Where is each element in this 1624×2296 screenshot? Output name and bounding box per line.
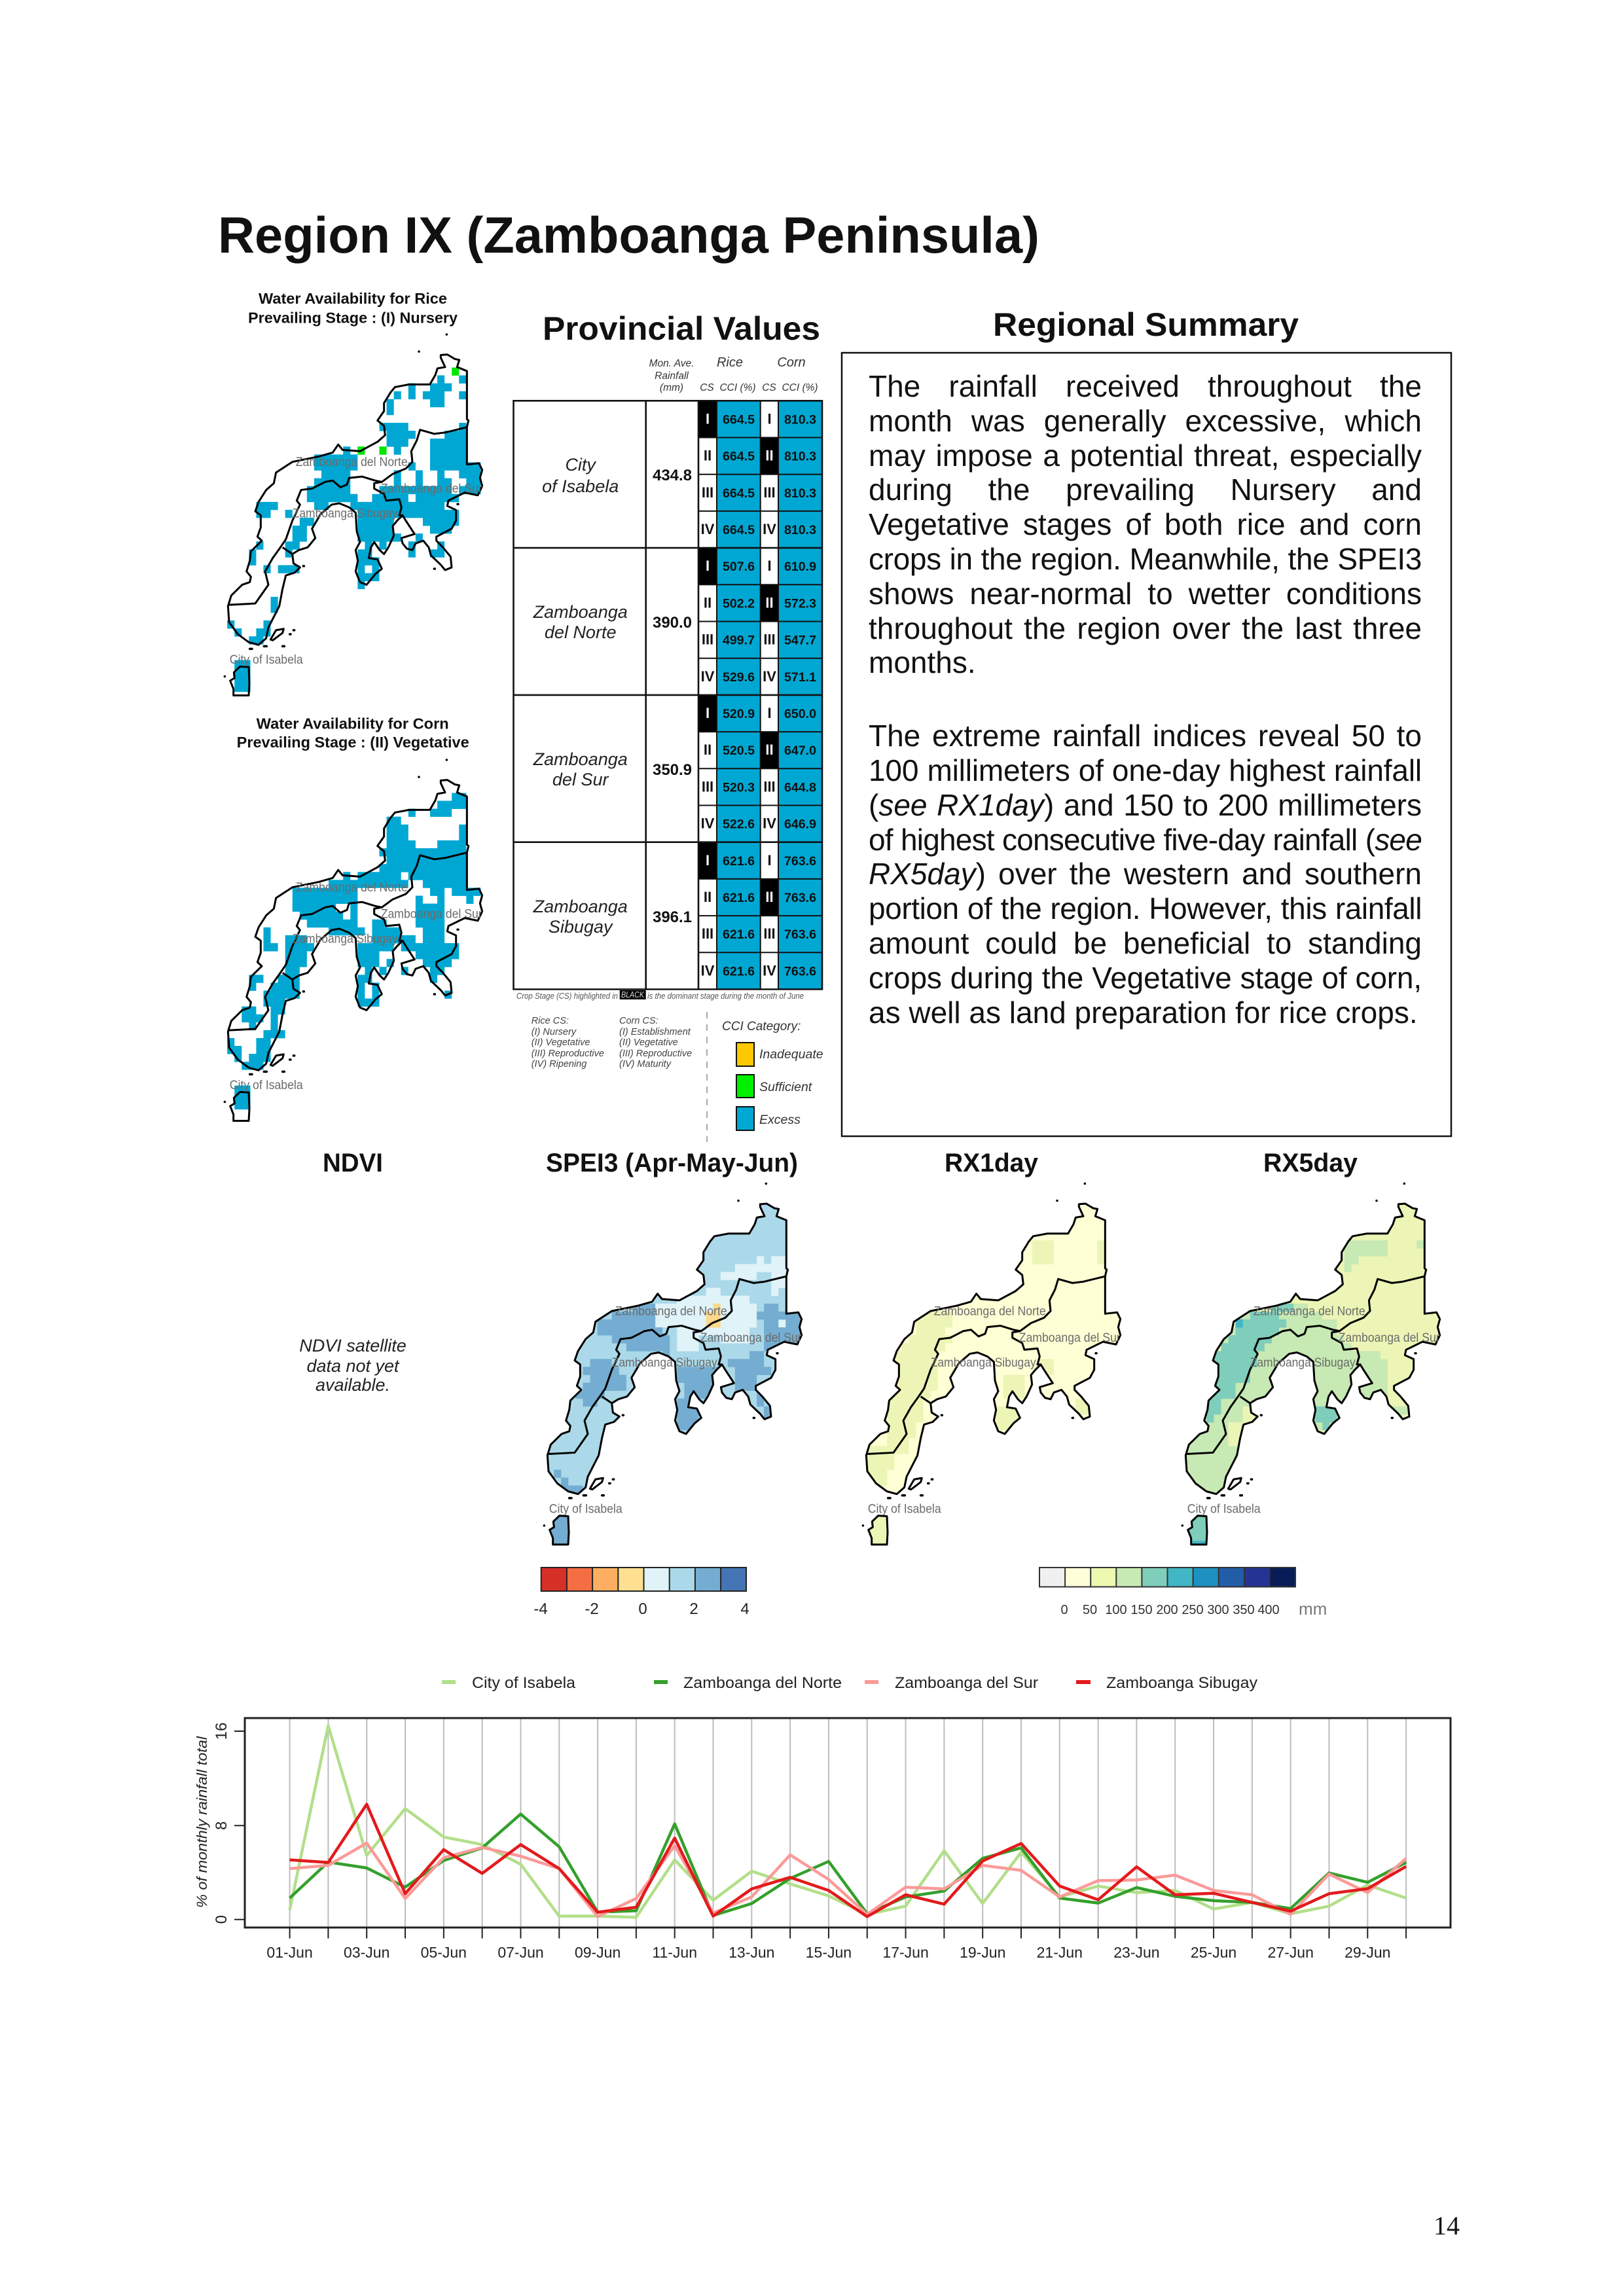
map: RX1day: City of Isabela: [868, 1501, 941, 1516]
rice crop stages: IV: [701, 668, 715, 685]
x axis date labels: 07-Jun: [497, 1944, 544, 1961]
rice crop stages: I: [706, 852, 710, 869]
corn crop stages: I: [767, 705, 772, 721]
legend: rainfall colour scale: [1039, 1568, 1327, 1619]
province names: Zamboanga: [533, 749, 628, 769]
series: Zamboanga del Norte: [290, 1814, 1406, 1916]
x axis date labels: 05-Jun: [421, 1944, 467, 1961]
corn crop stages: IV: [763, 816, 776, 832]
rice crop stages: IV: [701, 816, 715, 832]
legend: CCI category: [722, 1020, 823, 1130]
rice crop stages: IV: [701, 962, 715, 978]
legend: rainfall colour scale: 200: [1156, 1603, 1178, 1617]
rice CCI values: 621.6: [723, 964, 755, 978]
map: corn water availability: [225, 760, 482, 1121]
map: RX1day: Zamboanga del Sur: [1019, 1331, 1121, 1345]
corn CCI values: 810.3: [784, 412, 816, 427]
rice CCI values: 507.6: [723, 560, 755, 574]
table column headers: Corn: [777, 355, 806, 370]
rice crop stages: I: [706, 410, 710, 427]
map: rice water availability: Zamboanga del Sur: [381, 482, 482, 496]
chart legend: Zamboanga del Norte: [683, 1674, 842, 1692]
text block: regional summary: [869, 369, 1422, 1030]
corn CCI values: [784, 412, 816, 978]
legend: corn crop stages: (IV) Maturity: [619, 1059, 672, 1069]
heading: regional summary: Regional Summary: [993, 306, 1299, 343]
series: Zamboanga del Sur: [290, 1843, 1406, 1916]
map: RX5day: City of Isabela: [1187, 1501, 1261, 1516]
corn crop stages: I: [767, 558, 772, 574]
map: RX1day: Zamboanga del Norte: [934, 1304, 1046, 1318]
map: corn water availability: Zamboanga del Sur: [381, 907, 482, 922]
corn crop stages: III: [763, 484, 776, 501]
rice CCI values: 520.3: [723, 780, 755, 795]
province names: [533, 455, 628, 937]
heading: water availability for rice: Prevailing Stage : (I) Nursery: [248, 309, 458, 326]
NDVI note: data not yet: [306, 1356, 400, 1376]
table column headers: CCI (%): [719, 382, 756, 393]
x axis date labels: 03-Jun: [344, 1944, 389, 1961]
map: SPEI3: Zamboanga del Norte: [615, 1304, 727, 1318]
NDVI note: [299, 1336, 406, 1395]
table column headers: CS: [700, 382, 714, 393]
table footnote: [516, 990, 804, 1001]
text block: regional summary: month was generally excessive, which: [869, 404, 1422, 438]
series: City of Isabela: [290, 1726, 1406, 1917]
monthly average rainfall values: 350.9: [653, 761, 692, 779]
text block: regional summary: throughout the region over the last three: [869, 611, 1422, 645]
map: corn water availability: Zamboanga del Norte: [296, 880, 408, 895]
corn crop stages: IV: [763, 962, 776, 978]
x axis date labels: 19-Jun: [960, 1944, 1005, 1961]
legend: corn crop stages: Corn CS:: [619, 1016, 659, 1026]
heading: RX5day: RX5day: [1263, 1149, 1358, 1177]
corn CCI values: 810.3: [784, 523, 816, 537]
map: RX1day: Zamboanga Sibugay: [931, 1355, 1036, 1370]
heading: water availability for corn: Water Availability for Corn: [257, 715, 449, 732]
corn CCI values: 763.6: [784, 964, 816, 978]
line chart: daily share of monthly rainfall: [194, 1718, 1451, 1961]
rice CCI values: [723, 412, 755, 978]
rice CCI values: 664.5: [723, 450, 755, 464]
corn CCI values: 810.3: [784, 486, 816, 501]
legend: rainfall colour scale: 50: [1083, 1603, 1097, 1617]
province names: del Sur: [552, 770, 609, 789]
heading: SPEI3: SPEI3 (Apr-May-Jun): [546, 1149, 798, 1177]
map: SPEI3: [544, 1183, 802, 1545]
rice CCI values: 529.6: [723, 670, 755, 685]
map: rice water availability: Zamboanga del Norte: [296, 455, 408, 469]
legend: corn crop stages: (III) Reproductive: [619, 1049, 692, 1059]
rice CCI values: 520.5: [723, 744, 755, 758]
legend: rice crop stages: (IV) Ripening: [532, 1059, 586, 1069]
monthly average rainfall values: [653, 467, 692, 926]
table column headers: CS: [762, 382, 776, 393]
text block: regional summary: The extreme rainfall indices reveal 50 to: [869, 719, 1422, 753]
text block: regional summary: RX5day) over the western and southern: [869, 857, 1422, 891]
legend: rainfall colour scale: 150: [1130, 1603, 1153, 1617]
rice CCI values: 621.6: [723, 927, 755, 942]
legend: CCI category: Sufficient: [759, 1080, 813, 1094]
monthly average rainfall values: 396.1: [653, 908, 692, 926]
corn CCI values: 763.6: [784, 927, 816, 942]
rice crop stages: [701, 410, 715, 978]
x axis date labels: 25-Jun: [1191, 1944, 1236, 1961]
text block: regional summary: crops in the region. Meanwhile, the SPEI3: [869, 542, 1422, 576]
chart legend: City of Isabela: [472, 1674, 576, 1692]
map: RX5day: Zamboanga Sibugay: [1250, 1355, 1356, 1370]
corn crop stages: [763, 410, 776, 978]
x axis date labels: [266, 1944, 1390, 1961]
y axis labels: [194, 1723, 230, 1924]
rice crop stages: III: [702, 632, 713, 648]
map: RX1day: [863, 1183, 1121, 1545]
map: rice water availability: [225, 334, 482, 695]
province names: Sibugay: [549, 917, 613, 937]
corn crop stages: II: [765, 448, 774, 464]
heading: water availability for corn: [237, 715, 469, 751]
table column headers: CCI (%): [782, 382, 818, 393]
corn crop stages: I: [767, 410, 772, 427]
table column headers: Rainfall: [655, 370, 689, 382]
text block: regional summary: crops during the Vegetative stage of corn,: [869, 961, 1422, 995]
table footnote: Crop Stage (CS) highlighted in: [516, 991, 618, 1001]
corn CCI values: 547.7: [784, 634, 816, 648]
map: SPEI3: Zamboanga del Sur: [700, 1331, 802, 1345]
table column headers: [649, 355, 818, 393]
legend: rainfall colour scale: 250: [1182, 1603, 1204, 1617]
rice crop stages: II: [704, 594, 712, 611]
chart legend: Zamboanga Sibugay: [1106, 1674, 1257, 1692]
legend: SPEI3 colour scale: [533, 1568, 749, 1618]
rice crop stages: III: [702, 778, 713, 795]
province names: del Norte: [545, 622, 616, 642]
x axis date labels: 11-Jun: [652, 1944, 697, 1961]
x axis date labels: 27-Jun: [1268, 1944, 1314, 1961]
rice crop stages: II: [704, 448, 712, 464]
text block: regional summary: as well as land preparation for rice crops.: [869, 996, 1418, 1030]
legend: SPEI3 colour scale: 4: [740, 1600, 749, 1618]
rice CCI values: 520.9: [723, 707, 755, 721]
legend: rice crop stages: Rice CS:: [532, 1016, 569, 1026]
rice CCI values: 621.6: [723, 891, 755, 905]
rice CCI values: 499.7: [723, 634, 755, 648]
legend: rainfall colour scale: 0: [1060, 1603, 1068, 1617]
text block: regional summary: portion of the region. However, this rainfall: [869, 891, 1422, 925]
corn crop stages: II: [765, 742, 774, 758]
province names: of Isabela: [542, 476, 619, 496]
text block: regional summary: 100 millimeters of one-day highest rainfall: [869, 753, 1422, 787]
series: Zamboanga Sibugay: [290, 1804, 1406, 1916]
rice crop stages: III: [702, 484, 713, 501]
rice crop stages: III: [702, 925, 713, 942]
legend: rainfall colour scale: 400: [1257, 1603, 1280, 1617]
corn crop stages: III: [763, 925, 776, 942]
map: RX5day: Zamboanga del Norte: [1254, 1304, 1365, 1318]
legend: SPEI3 colour scale: -4: [533, 1600, 548, 1618]
corn CCI values: 763.6: [784, 854, 816, 869]
x axis date labels: 13-Jun: [729, 1944, 774, 1961]
corn CCI values: 763.6: [784, 891, 816, 905]
y axis labels: 8: [213, 1821, 230, 1830]
rice CCI values: 664.5: [723, 523, 755, 537]
table column headers: (mm): [660, 382, 683, 393]
legend: corn crop stages: [619, 1016, 692, 1069]
text block: regional summary: may impose a potential threat, especially: [869, 439, 1422, 473]
corn crop stages: II: [765, 889, 774, 905]
y axis labels: % of monthly rainfall total: [194, 1736, 210, 1908]
x axis date labels: 09-Jun: [575, 1944, 621, 1961]
page number: 14: [1434, 2211, 1460, 2240]
corn CCI values: 650.0: [784, 707, 816, 721]
corn crop stages: II: [765, 594, 774, 611]
text block: regional summary: The rainfall received throughout the: [869, 369, 1422, 403]
province names: Zamboanga: [533, 897, 628, 916]
x axis date labels: 01-Jun: [266, 1944, 313, 1961]
table: provincial values: [513, 401, 822, 990]
y axis labels: 0: [213, 1915, 230, 1924]
map: SPEI3: City of Isabela: [549, 1501, 623, 1516]
corn crop stages: III: [763, 778, 776, 795]
table column headers: Rice: [717, 355, 743, 370]
text block: regional summary: months.: [869, 645, 976, 679]
rice crop stages: IV: [701, 521, 715, 537]
legend: rice crop stages: (II) Vegetative: [532, 1037, 590, 1048]
rice CCI values: 522.6: [723, 817, 755, 832]
rice crop stages: II: [704, 889, 712, 905]
map: corn water availability: City of Isabela: [230, 1078, 303, 1092]
heading: water availability for rice: Water Availability for Rice: [259, 290, 447, 307]
corn crop stages: I: [767, 852, 772, 869]
panel: regional summary box: [842, 353, 1451, 1136]
monthly average rainfall values: 434.8: [653, 467, 692, 484]
table footnote: BLACK: [621, 990, 645, 999]
legend: SPEI3 colour scale: 0: [638, 1600, 647, 1618]
text block: regional summary: during the prevailing Nursery and: [869, 473, 1422, 507]
legend: CCI category: CCI Category:: [722, 1020, 801, 1033]
x axis date labels: 17-Jun: [882, 1944, 929, 1961]
corn CCI values: 646.9: [784, 817, 816, 832]
NDVI note: available.: [316, 1375, 390, 1395]
province names: Zamboanga: [533, 602, 628, 622]
corn CCI values: 571.1: [784, 670, 816, 685]
text block: regional summary: amount could be beneficial to standing: [869, 926, 1422, 960]
heading: water availability for rice: [248, 290, 458, 326]
text block: regional summary: (see RX1day) and 150 to 200 millimeters: [869, 788, 1422, 822]
map: RX5day: Zamboanga del Sur: [1339, 1331, 1440, 1345]
legend: rainfall colour scale: 350: [1233, 1603, 1255, 1617]
legend: rainfall colour scale: 100: [1105, 1603, 1127, 1617]
x axis date labels: 15-Jun: [806, 1944, 852, 1961]
heading: RX1day: RX1day: [945, 1149, 1039, 1177]
x axis date labels: 29-Jun: [1344, 1944, 1390, 1961]
map: RX5day: [1182, 1183, 1440, 1545]
map: rice water availability: City of Isabela: [230, 653, 303, 667]
rice CCI values: 502.2: [723, 596, 755, 611]
corn CCI values: 647.0: [784, 744, 816, 758]
corn CCI values: 610.9: [784, 560, 816, 574]
legend: CCI category: Inadequate: [759, 1047, 823, 1062]
corn crop stages: IV: [763, 668, 776, 685]
map: rice water availability: Zamboanga Sibugay: [293, 507, 398, 521]
province names: City: [565, 455, 596, 475]
heading: water availability for corn: Prevailing Stage : (II) Vegetative: [237, 734, 469, 751]
text block: regional summary: shows near-normal to wetter conditions: [869, 577, 1422, 611]
rice CCI values: 621.6: [723, 854, 755, 869]
text block: regional summary: Vegetative stages of both rice and corn: [869, 507, 1422, 541]
legend: rice crop stages: (I) Nursery: [532, 1027, 577, 1037]
legend: SPEI3 colour scale: -2: [585, 1600, 599, 1618]
table footnote: is the dominant stage during the month of June: [647, 991, 804, 1001]
legend: rainfall colour scale: 300: [1207, 1603, 1229, 1617]
legend: rice crop stages: [532, 1016, 604, 1069]
x axis date labels: 21-Jun: [1037, 1944, 1083, 1961]
rice CCI values: 664.5: [723, 486, 755, 501]
heading: NDVI: NDVI: [323, 1149, 383, 1177]
corn CCI values: 644.8: [784, 780, 816, 795]
rice crop stages: I: [706, 705, 710, 721]
rice CCI values: 664.5: [723, 412, 755, 427]
NDVI note: NDVI satellite: [299, 1336, 406, 1355]
legend: corn crop stages: (I) Establishment: [619, 1027, 691, 1037]
heading: provincial values: Provincial Values: [543, 310, 820, 347]
corn CCI values: 810.3: [784, 450, 816, 464]
corn crop stages: III: [763, 632, 776, 648]
legend: CCI category: Excess: [759, 1113, 801, 1127]
table column headers: Mon. Ave.: [649, 358, 694, 369]
corn CCI values: 572.3: [784, 596, 816, 611]
chart legend: Zamboanga del Sur: [895, 1674, 1038, 1692]
x axis date labels: 23-Jun: [1113, 1944, 1160, 1961]
map: corn water availability: Zamboanga Sibugay: [293, 932, 398, 946]
monthly average rainfall values: 390.0: [653, 614, 692, 632]
corn crop stages: IV: [763, 521, 776, 537]
legend: rice crop stages: (III) Reproductive: [532, 1049, 604, 1059]
legend: rainfall colour scale: mm: [1299, 1599, 1327, 1619]
rice crop stages: I: [706, 558, 710, 574]
text block: regional summary: of highest consecutive five-day rainfall (see: [869, 823, 1422, 857]
chart legend: [442, 1674, 1257, 1692]
y axis labels: 16: [213, 1723, 230, 1740]
legend: corn crop stages: (II) Vegetative: [619, 1037, 678, 1048]
title: Region IX (Zamboanga Peninsula): [218, 206, 1039, 264]
rice crop stages: II: [704, 742, 712, 758]
map: SPEI3: Zamboanga Sibugay: [612, 1355, 717, 1370]
legend: SPEI3 colour scale: 2: [689, 1600, 698, 1618]
